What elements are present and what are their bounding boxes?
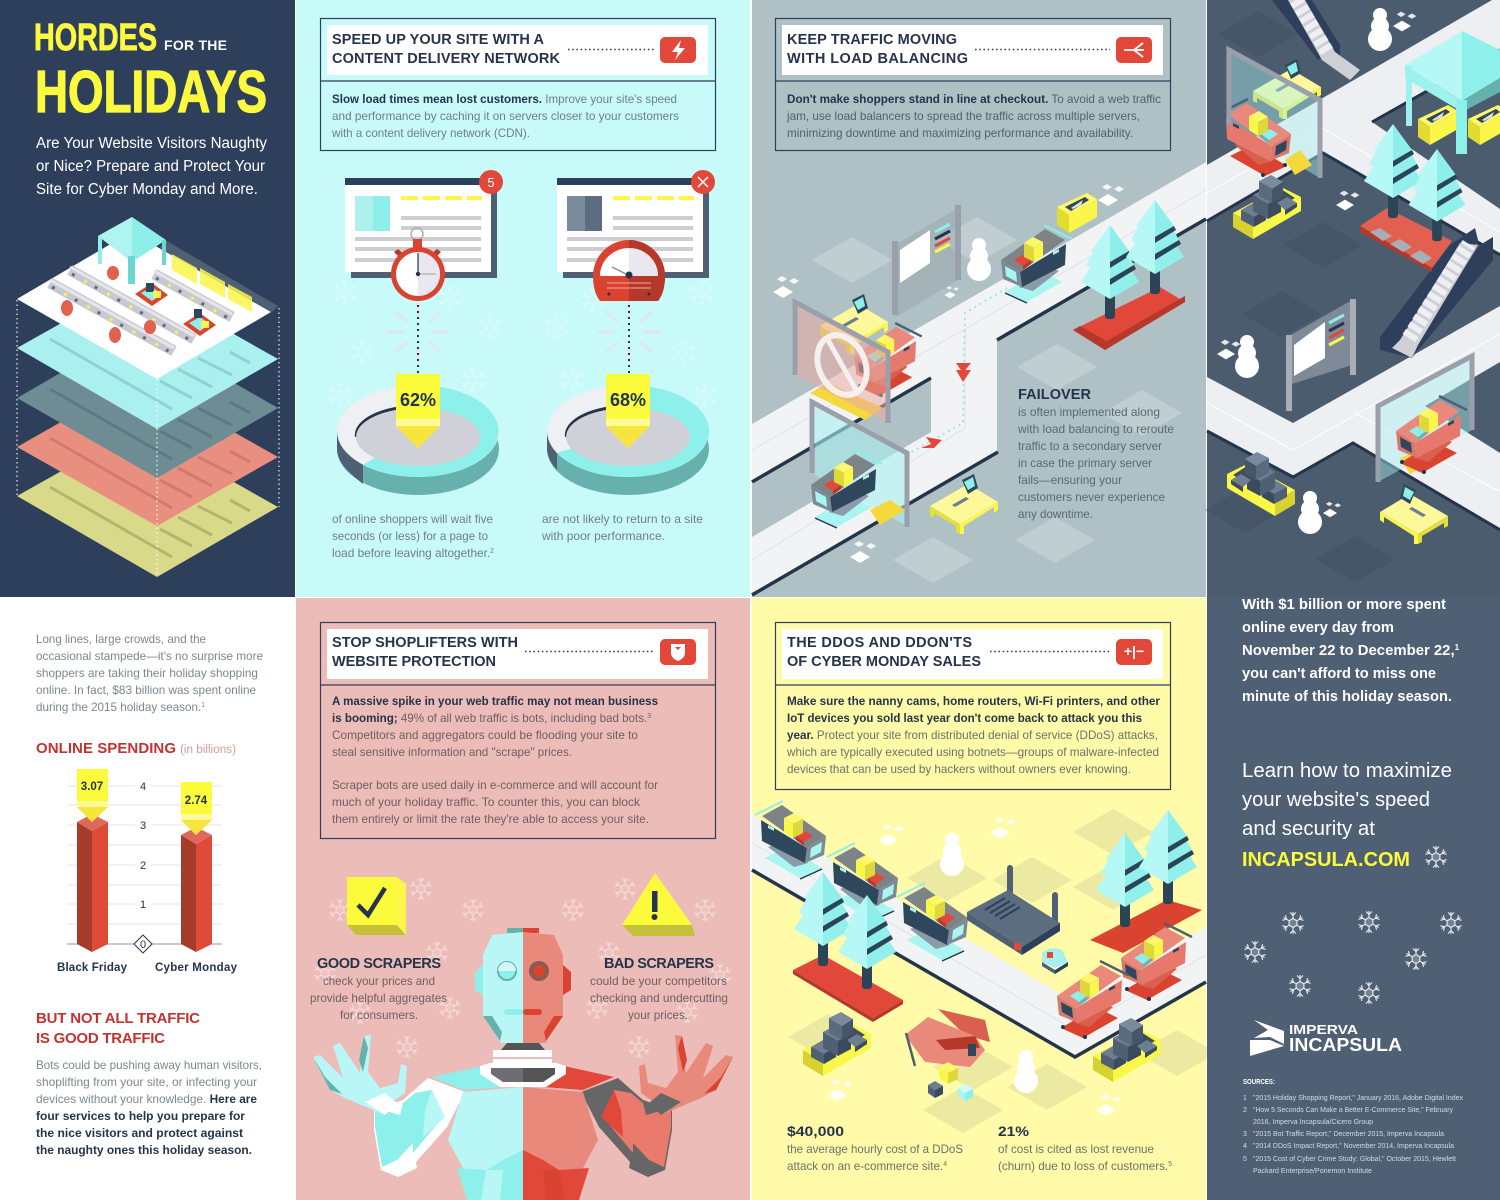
stat: 40000 xyxy=(787,1123,963,1173)
body text: much of your holiday traffic. To counter this, you can block xyxy=(332,795,641,809)
robot left half xyxy=(313,928,523,1200)
axis labels: 2 xyxy=(140,860,146,872)
spilled boxes xyxy=(928,1062,973,1101)
red carts xyxy=(1057,923,1192,1039)
failover text: with load balancing to reroute xyxy=(1017,422,1174,436)
panel: ddos xyxy=(752,598,1217,1200)
body text xyxy=(331,92,679,140)
chart heading: ONLINE SPENDING xyxy=(36,740,176,757)
body text: Bots could be pushing away human visitors, xyxy=(36,1058,262,1072)
heading: WITH LOAD BALANCING xyxy=(787,51,968,67)
body text: Competitors and aggregators could be flooding your site to xyxy=(332,728,638,742)
bar chart xyxy=(57,769,238,974)
failover text: in case the primary server xyxy=(1018,456,1152,470)
sources: "2015 Cost of Cyber Crime Study: Global," October 2015, Hewlett xyxy=(1253,1156,1456,1163)
router xyxy=(967,865,1060,955)
panel: call to action xyxy=(1207,596,1500,1200)
axis labels: 4 xyxy=(140,781,146,793)
failover text: customers never experience xyxy=(1018,490,1165,504)
heading: WEBSITE PROTECTION xyxy=(332,654,496,670)
lead text: November 22 to December 22, xyxy=(1242,642,1456,659)
trees left xyxy=(793,872,903,1022)
donut: 62 percent xyxy=(337,374,499,495)
sources: "2015 Bot Traffic Report," December 2015, Imperva Incapsula xyxy=(1253,1131,1444,1138)
good scrapers text: check your prices and xyxy=(323,974,435,988)
good scrapers text xyxy=(310,956,447,1022)
failover text: fails—ensuring your xyxy=(1018,473,1122,487)
panel: load balancing xyxy=(752,0,1206,597)
sparkles xyxy=(827,817,1122,1116)
crashed red cart xyxy=(905,1009,990,1067)
callout box: load balancing xyxy=(775,18,1170,150)
panel: title xyxy=(0,0,295,597)
intro text xyxy=(36,632,263,714)
floor tiles xyxy=(1205,11,1395,582)
navy cart at gate xyxy=(811,402,907,528)
bad scrapers text: BAD SCRAPERS xyxy=(604,956,714,972)
cta text: your website's speed xyxy=(1242,789,1430,811)
failover text: traffic to a secondary server xyxy=(1018,439,1162,453)
stat captions: of online shoppers will wait five xyxy=(332,512,493,526)
title: hordes for the holidays: FOR THE xyxy=(164,37,227,53)
sources: "2014 DDoS Impact Report," November 2014, Imperva Incapsula xyxy=(1253,1143,1454,1150)
tent and bins xyxy=(1405,31,1500,154)
stat: 21 percent: 21% xyxy=(998,1123,1030,1139)
axis labels: 1 xyxy=(140,899,146,911)
heading xyxy=(787,635,981,670)
good scrapers text: GOOD SCRAPERS xyxy=(317,956,441,972)
road xyxy=(752,815,1206,1057)
snowflakes xyxy=(1244,846,1462,1004)
desk xyxy=(1380,484,1448,544)
subtitle: Are Your Website Visitors Naughty xyxy=(36,135,267,152)
robot neck xyxy=(480,1043,566,1087)
icon: split xyxy=(1116,37,1152,63)
heading xyxy=(332,32,561,67)
lead text: online every day from xyxy=(1242,619,1394,636)
bar: black friday xyxy=(77,769,108,952)
floor tiles xyxy=(812,217,1182,583)
stat captions: seconds (or less) for a page to xyxy=(332,529,488,543)
icon: check box xyxy=(347,877,406,935)
stat: 40000: $40,000 xyxy=(787,1123,844,1139)
sources: "2015 Holiday Shopping Report," January 2016, Adobe Digital Index xyxy=(1253,1095,1463,1102)
good scrapers text: provide helpful aggregates xyxy=(310,991,447,1005)
crates xyxy=(1233,175,1301,239)
sources: "How 5 Seconds Can Make a Better E-Commerce Site," February xyxy=(1253,1107,1453,1114)
callout box: cdn xyxy=(320,18,716,150)
intro text: shoppers are taking their holiday shopping xyxy=(36,666,258,680)
title: hordes for the holidays xyxy=(34,17,267,125)
bar labels xyxy=(57,962,238,974)
heading: THE DDOS AND DDON'TS xyxy=(787,635,972,651)
bar labels: Cyber Monday xyxy=(155,962,238,974)
body text: minimizing downtime and maximizing performance and availability. xyxy=(787,126,1133,140)
body text: Don't make shoppers stand in line at checkout. To avoid a web traffic xyxy=(787,92,1161,106)
stat captions: 2 xyxy=(490,548,494,555)
cta text: and security at xyxy=(1242,818,1375,840)
stat: 40000: 4 xyxy=(943,1161,947,1168)
failover text: is often implemented along xyxy=(1018,405,1160,419)
body text xyxy=(36,1058,262,1157)
icon: warning triangle xyxy=(622,873,695,936)
good scrapers text: for consumers. xyxy=(340,1008,418,1022)
snowflakes xyxy=(314,878,731,1058)
marker: 62% xyxy=(396,374,440,448)
desk bottom xyxy=(930,474,998,534)
logo: IMPERVA xyxy=(1289,1022,1359,1037)
heading: OF CYBER MONDAY SALES xyxy=(787,654,981,670)
subtitle: or Nice? Prepare and Protect Your xyxy=(36,158,265,175)
lead text xyxy=(1242,596,1460,705)
icon: stopwatch xyxy=(391,228,445,301)
icon: shield xyxy=(660,639,696,665)
intro text: online. In fact, $83 billion was spent online xyxy=(36,683,256,697)
icon: plus minus xyxy=(1116,639,1152,665)
stat: 21 percent xyxy=(998,1123,1172,1173)
lead text: you can't afford to miss one xyxy=(1242,665,1436,682)
body text xyxy=(786,92,1161,140)
snowflakes xyxy=(328,281,717,407)
title: hordes for the holidays: HOLIDAYS xyxy=(35,59,267,125)
heading: KEEP TRAFFIC MOVING xyxy=(787,32,957,48)
body text: which are typically executed using botnets—groups of malware-infected xyxy=(786,745,1159,759)
callout box: ddos xyxy=(775,622,1170,790)
bad scrapers text xyxy=(590,956,728,1022)
body text: Slow load times mean lost customers. Improve your site's speed xyxy=(332,92,677,106)
cta text xyxy=(1242,760,1452,871)
intro text: 1 xyxy=(201,702,205,709)
body text: four services to help you prepare for xyxy=(36,1109,245,1123)
marker: 68%: 68% xyxy=(610,390,646,410)
subheading: BUT NOT ALL TRAFFIC xyxy=(36,1010,200,1027)
sparkles xyxy=(1217,12,1416,517)
subheading xyxy=(36,1010,200,1047)
illustration: stacked store layers xyxy=(17,217,279,577)
failover path arrows xyxy=(910,288,1007,453)
bar: cyber monday xyxy=(181,782,212,952)
heading: STOP SHOPLIFTERS WITH xyxy=(332,635,518,651)
icon: plus minus: +|− xyxy=(1124,643,1144,659)
body text: devices without your knowledge. Here are xyxy=(36,1092,257,1106)
body text: year. Protect your site from distributed denial of service (DDoS) attacks, xyxy=(787,728,1158,742)
info sign xyxy=(1286,299,1356,411)
panel: content delivery network xyxy=(296,0,750,597)
stat: 21 percent: (churn) due to loss of customers. xyxy=(998,1159,1173,1173)
browser window: failed page with gauge xyxy=(557,170,715,301)
marker: 68% xyxy=(606,374,650,448)
bar: cyber monday: 2.74 xyxy=(185,795,208,807)
chart heading xyxy=(36,740,236,757)
icon: gauge xyxy=(593,240,665,301)
body text xyxy=(786,694,1160,776)
heading xyxy=(787,32,968,67)
donut: 68 percent xyxy=(547,374,709,495)
lead text: With $1 billion or more spent xyxy=(1242,596,1446,613)
snowmen xyxy=(940,833,1038,1093)
browser window: slow page with stopwatch xyxy=(345,170,503,301)
panel: intro and spending chart xyxy=(0,598,295,1200)
title: hordes for the holidays: HORDES xyxy=(34,17,157,59)
body text xyxy=(332,694,658,826)
cta text: INCAPSULA.COM xyxy=(1242,849,1410,871)
robot right half xyxy=(523,928,733,1200)
icon: lightning xyxy=(660,37,696,63)
navy cart on road xyxy=(1001,225,1072,303)
small device xyxy=(1042,948,1068,974)
stat captions: with poor performance. xyxy=(541,529,665,543)
logo xyxy=(1250,1020,1402,1056)
body text: shoplifting from your site, or infecting your xyxy=(36,1075,257,1089)
cta text: Learn how to maximize xyxy=(1242,760,1452,782)
snowman xyxy=(967,238,991,281)
lead text: 1 xyxy=(1455,643,1460,652)
navy carts xyxy=(755,801,968,961)
sources: 1 xyxy=(1243,1095,1247,1102)
snowmen xyxy=(1235,8,1392,534)
stat: 21 percent: of cost is cited as lost revenue xyxy=(998,1142,1154,1156)
sources: 2016, Imperva Incapsula/Cicero Group xyxy=(1253,1119,1373,1126)
body text: is booming; 49% of all web traffic is bots, including bad bots. xyxy=(332,711,656,725)
bar labels: Black Friday xyxy=(57,962,128,974)
body text: Scraper bots are used daily in e-commerce and will account for xyxy=(332,778,658,792)
red cart gate top xyxy=(1220,50,1321,178)
body text: Make sure the nanny cams, home routers, Wi-Fi printers, and other xyxy=(787,694,1160,708)
sources xyxy=(1243,1079,1463,1175)
bad scrapers text: checking and undercutting xyxy=(590,991,728,1005)
stat: 40000: attack on an e-commerce site. xyxy=(787,1159,948,1173)
heading xyxy=(332,635,518,670)
body text: A massive spike in your web traffic may not mean business xyxy=(332,694,658,708)
intro text: Long lines, large crowds, and the xyxy=(36,632,206,646)
axis labels xyxy=(134,778,152,953)
stat captions: are not likely to return to a site xyxy=(542,512,703,526)
intro text: occasional stampede—it's no surprise more xyxy=(36,649,263,663)
sources: 4 xyxy=(1243,1143,1247,1150)
failover text: any downtime. xyxy=(1018,507,1093,521)
browser window: slow page with stopwatch: 5 xyxy=(487,175,495,190)
bar: black friday: 3.07 xyxy=(81,781,103,793)
panel: website protection xyxy=(296,598,750,1200)
trees on platform xyxy=(1073,200,1185,350)
sources: 5 xyxy=(1243,1156,1247,1163)
stat captions xyxy=(332,512,703,560)
trees on platform xyxy=(1360,124,1465,272)
body text: with a content delivery network (CDN). xyxy=(331,126,530,140)
stat: 21 percent: 5 xyxy=(1168,1161,1172,1168)
body text: and performance by caching it on servers closer to your customers xyxy=(332,109,679,123)
axis labels: 3 xyxy=(140,820,146,832)
red cart gate bottom xyxy=(1378,356,1472,482)
bad scrapers text: your prices. xyxy=(628,1008,688,1022)
crates lower xyxy=(1227,452,1295,516)
stat captions: load before leaving altogether. xyxy=(332,546,493,560)
axis labels: 0 xyxy=(140,939,146,951)
body text: jam, use load balancers to spread the traffic across multiple servers, xyxy=(786,109,1140,123)
sources: 3 xyxy=(1243,1131,1247,1138)
bad scrapers text: could be your competitors xyxy=(590,974,727,988)
body text: devices that can be used by hackers without owners ever knowing. xyxy=(787,762,1131,776)
failover text: FAILOVER xyxy=(1018,387,1092,403)
callout box: protection xyxy=(320,622,716,838)
sources: SOURCES: xyxy=(1243,1079,1275,1086)
intro text: during the 2015 holiday season. xyxy=(36,700,206,714)
stairs top xyxy=(1272,0,1360,80)
spinners xyxy=(388,304,659,360)
illustration: half good half bad robot xyxy=(313,928,733,1200)
body text: the nice visitors and protect against xyxy=(36,1126,243,1140)
desk top-left xyxy=(820,294,888,354)
body text: steal sensitive information and "scrape" prices. xyxy=(332,745,572,759)
yellow bin xyxy=(1057,193,1097,233)
logo: INCAPSULA xyxy=(1289,1035,1402,1055)
subtitle: Site for Cyber Monday and More. xyxy=(36,181,258,198)
crates xyxy=(803,1012,1161,1082)
info sign xyxy=(892,205,961,318)
floor tiles xyxy=(788,809,1217,1133)
body text: IoT devices you sold last year don't come back to attack you this xyxy=(787,711,1142,725)
body text: 3 xyxy=(647,713,651,720)
chart heading: (in billions) xyxy=(180,744,236,756)
panel: store map dark xyxy=(1205,0,1500,597)
marker: 62%: 62% xyxy=(400,390,436,410)
sparkles xyxy=(773,184,1124,563)
subheading: IS GOOD TRAFFIC xyxy=(36,1030,165,1047)
trees right xyxy=(1090,810,1202,953)
stairs bottom xyxy=(1380,228,1493,358)
failover text xyxy=(1017,387,1174,521)
road xyxy=(752,162,1206,595)
stat: 40000: the average hourly cost of a DDoS xyxy=(787,1142,963,1156)
body text: them entirely or limit the rate they're able to access your site. xyxy=(332,812,649,826)
body text: the naughty ones this holiday season. xyxy=(36,1143,252,1157)
blocked red cart xyxy=(795,302,922,423)
sources: Packard Enterprise/Ponemon Institute xyxy=(1253,1168,1372,1175)
lead text: minute of this holiday season. xyxy=(1242,688,1452,705)
subtitle xyxy=(36,135,267,198)
roads xyxy=(1207,0,1500,530)
heading: SPEED UP YOUR SITE WITH A xyxy=(332,32,545,48)
sources: 2 xyxy=(1243,1107,1247,1114)
heading: CONTENT DELIVERY NETWORK xyxy=(332,51,561,67)
